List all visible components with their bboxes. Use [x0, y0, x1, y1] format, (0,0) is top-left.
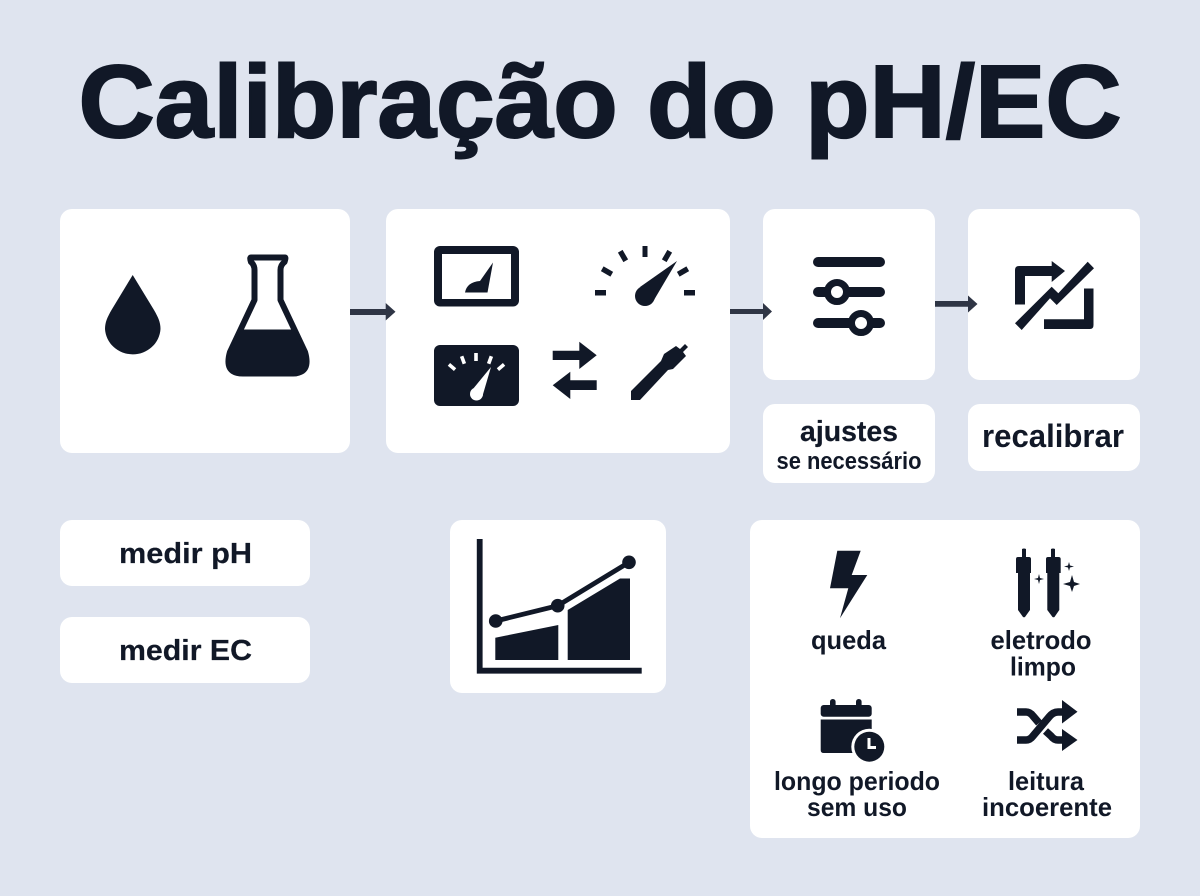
icon: flask — [227, 258, 307, 376]
icon: sliders — [813, 257, 885, 332]
item: leitura incoerente: leitura — [1008, 766, 1085, 796]
chart bars — [495, 578, 630, 660]
panel: adjustments icon — [763, 209, 935, 380]
label: adjustments — [763, 404, 935, 483]
label: adjustments: se necessário — [776, 448, 922, 475]
label: adjustments: ajustes — [800, 416, 898, 448]
title: Calibração do pH/EC — [78, 44, 1122, 159]
panel: measure sample — [60, 209, 350, 453]
icon: rectangular meter — [434, 246, 519, 306]
icon: open gauge — [595, 246, 695, 306]
icon: broken cycle — [1015, 261, 1094, 330]
arrow: meters to adjustments — [730, 303, 772, 320]
item: queda: queda — [811, 625, 887, 655]
label: recalibrate: recalibrar — [982, 418, 1124, 454]
panel: calibration chart — [450, 520, 666, 693]
panel: when to calibrate — [750, 520, 1140, 838]
icon: exchange arrows — [553, 342, 597, 399]
item: longo periodo sem uso: sem uso — [807, 792, 907, 822]
item: leitura incoerente — [982, 700, 1112, 822]
icon: water drop — [105, 275, 160, 354]
icon: filled gauge — [434, 345, 519, 406]
item: leitura incoerente: incoerente — [982, 792, 1112, 822]
label: measure EC — [60, 617, 310, 683]
item: queda — [811, 551, 887, 655]
arrow: sample to meters — [350, 303, 396, 320]
arrow: adjustments to recalibrate — [935, 296, 978, 312]
item: eletrodo limpo — [990, 548, 1092, 682]
label: measure pH — [60, 520, 310, 586]
label: measure EC: medir EC — [119, 635, 252, 667]
item: longo periodo sem uso — [774, 699, 940, 822]
panel: recalibrate icon — [968, 209, 1140, 380]
item: eletrodo limpo: limpo — [1010, 652, 1076, 682]
item: longo periodo sem uso: longo periodo — [774, 766, 940, 796]
label: recalibrate — [968, 404, 1140, 471]
item: eletrodo limpo: eletrodo — [990, 625, 1092, 655]
chart line — [489, 556, 636, 628]
label: measure pH: medir pH — [119, 538, 252, 570]
icon: probe — [631, 344, 688, 400]
chart axes — [480, 539, 642, 671]
panel: meters — [386, 209, 730, 453]
